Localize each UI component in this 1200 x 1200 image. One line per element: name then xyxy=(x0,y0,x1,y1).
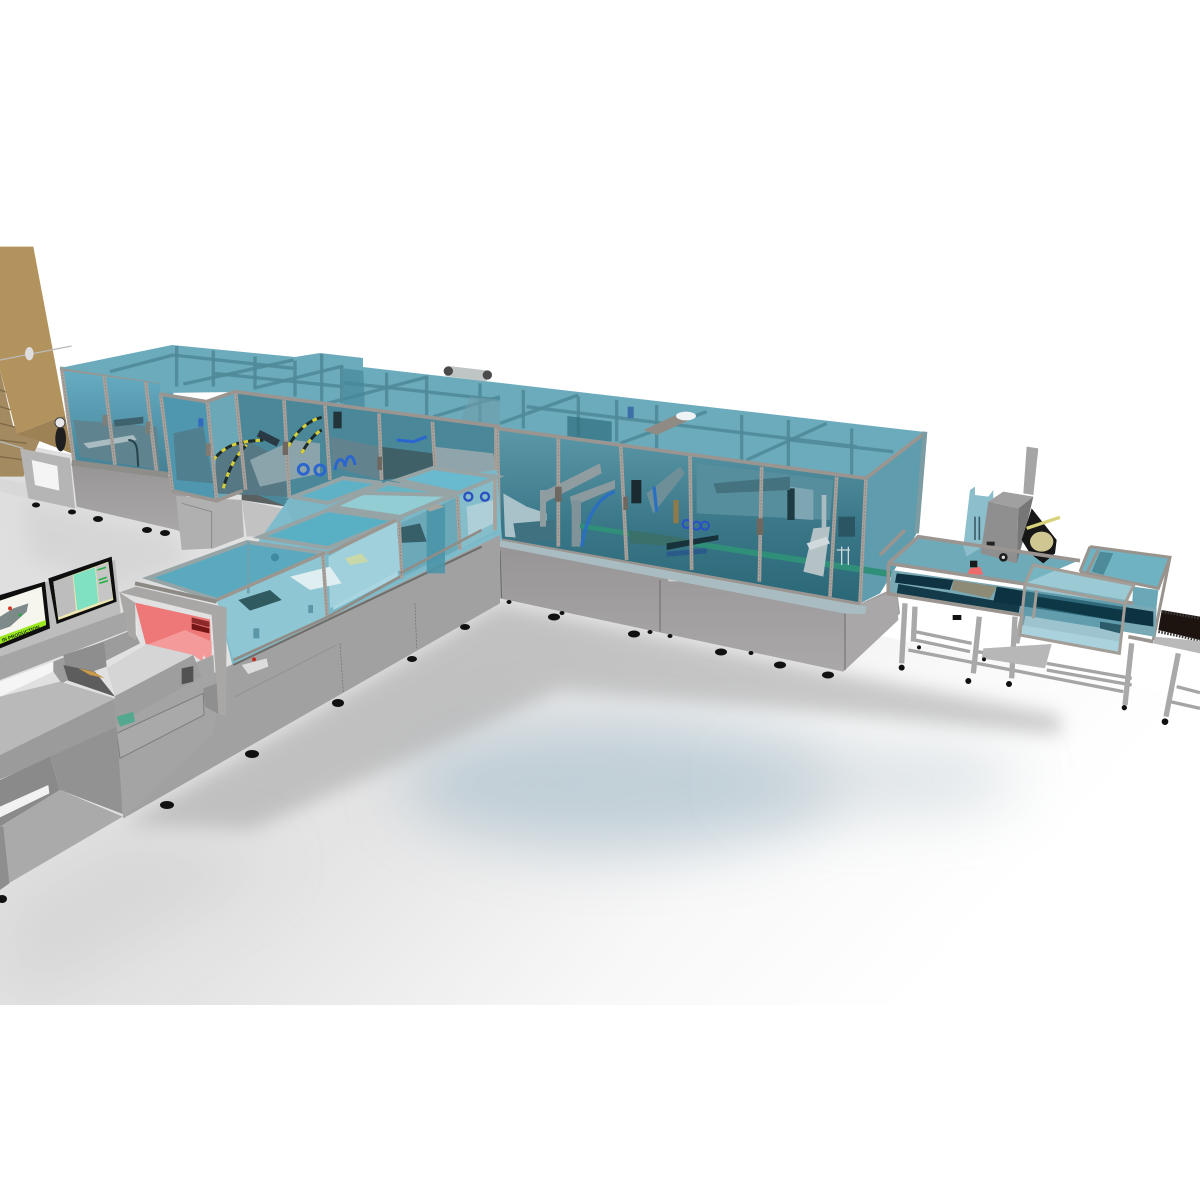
front pane interior D xyxy=(135,518,482,660)
parcels on table xyxy=(238,553,368,611)
base cabinet D xyxy=(117,535,500,818)
front glass frame xyxy=(880,530,1153,642)
green sensor box xyxy=(117,712,135,727)
illustration: automated packaging line xyxy=(0,246,1200,1005)
white light under conveyor xyxy=(917,607,1137,683)
shelf xyxy=(0,611,133,680)
upper glass pane xyxy=(890,537,1080,583)
glass faces B xyxy=(160,394,217,500)
red scanner tunnel xyxy=(135,603,213,675)
outfeed conveyor xyxy=(1153,610,1200,653)
rear glass faces D xyxy=(287,470,497,617)
roof beams left xyxy=(110,346,500,453)
conveyor table xyxy=(107,644,193,696)
base cabinets B xyxy=(176,492,290,550)
backing glass D xyxy=(217,470,502,668)
right side glass C xyxy=(860,432,925,603)
machinery A xyxy=(73,417,187,473)
back panel xyxy=(0,560,121,660)
floor xyxy=(0,448,1070,1005)
monitor right xyxy=(48,557,117,624)
stack guide xyxy=(963,487,993,557)
glass roof xyxy=(60,345,925,477)
monitor left: IN PRODUCTION xyxy=(1,624,41,644)
product tray xyxy=(63,642,115,697)
monitor left xyxy=(0,582,50,648)
base cabinet C xyxy=(500,547,900,672)
labeller head xyxy=(981,492,1060,563)
roof beams right xyxy=(500,390,893,477)
support legs xyxy=(899,603,1200,725)
lower drawer xyxy=(115,655,217,818)
machinery B xyxy=(173,412,497,497)
glass face A xyxy=(60,368,173,475)
conveyor belt xyxy=(888,570,1157,637)
labeller column xyxy=(1023,447,1038,495)
right conveyor and labelling section xyxy=(880,447,1200,725)
machinery C xyxy=(483,463,897,578)
base cabinet A xyxy=(72,463,187,535)
section C: main glass enclosure xyxy=(483,428,925,672)
section B: middle glass enclosure xyxy=(159,392,500,550)
roof panes D xyxy=(148,468,497,600)
cardboard box feeder xyxy=(0,247,75,508)
desk xyxy=(0,682,123,890)
operator desk and inspection station xyxy=(0,557,227,890)
rear box xyxy=(1080,547,1170,640)
tunnel frame xyxy=(119,587,227,717)
item boxes xyxy=(330,493,493,610)
section A: rear glass enclosure xyxy=(60,368,187,535)
middle glass box xyxy=(1020,565,1134,653)
section D: front L-shaped enclosure xyxy=(117,468,502,818)
red product xyxy=(967,561,983,575)
levelling feet xyxy=(0,502,834,903)
roof-mounted camera unit xyxy=(444,366,492,382)
front glass C xyxy=(497,428,865,603)
